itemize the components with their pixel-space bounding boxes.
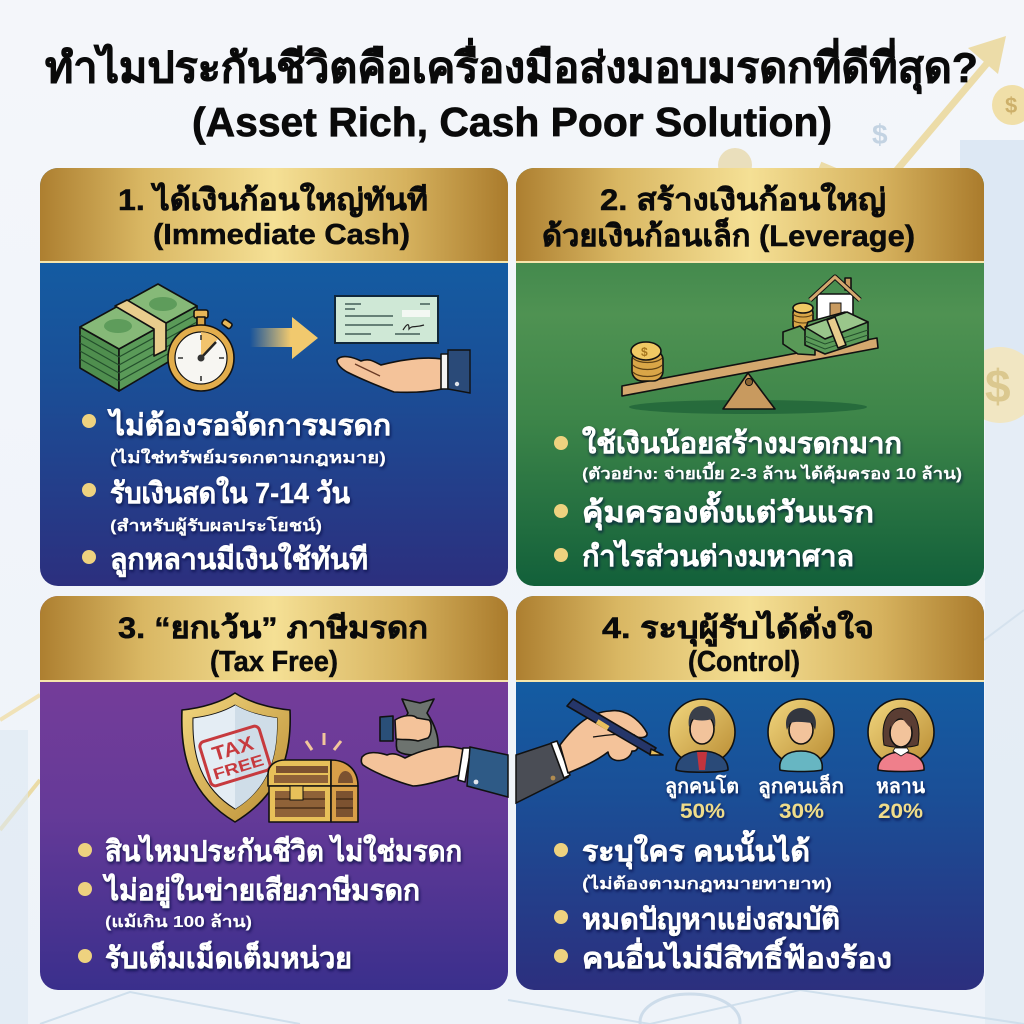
- house: [810, 277, 860, 322]
- panel 3 header: [40, 596, 508, 682]
- title: (Asset Rich, Cash Poor Solution): [192, 99, 832, 145]
- panel 2: leverage: [516, 168, 984, 586]
- bullet list: [554, 829, 892, 975]
- icon: tax free shield: [182, 693, 290, 822]
- bullet list: (สำหรับผู้รับผลประโยชน์): [110, 515, 322, 537]
- share labels: 20%: [878, 800, 923, 823]
- bullet list: (ไม่ต้องตามกฎหมายทายาท): [582, 874, 832, 893]
- icon: seesaw with coins, cash and house: [622, 277, 878, 414]
- icon: stack of cash with stopwatch: [80, 284, 234, 391]
- panel 3 header: 3. “ยกเว้น” ภาษีมรดก: [118, 612, 428, 645]
- share labels: หลาน: [876, 776, 925, 798]
- icon: stopwatch: [168, 310, 234, 391]
- bullet list: ลูกหลานมีเงินใช้ทันที: [110, 542, 368, 577]
- panel 4 header: [516, 596, 984, 682]
- icon: hand holding pen: [516, 699, 663, 803]
- arrow: [250, 317, 318, 359]
- panel 1 header: [40, 168, 508, 263]
- bullet list: สินไหมประกันชีวิต ไม่ใช่มรดก: [105, 834, 462, 868]
- panel 3: tax free: [40, 596, 508, 990]
- title: [45, 38, 978, 145]
- bullet list: [78, 834, 462, 975]
- bullet list: หมดปัญหาแย่งสมบัติ: [582, 904, 840, 937]
- panel 2 header: 2. สร้างเงินก้อนใหญ่: [600, 182, 886, 218]
- background with faint financial chart: $: [1005, 93, 1017, 118]
- panel 1 header: 1. ได้เงินก้อนใหญ่ทันที: [118, 182, 428, 218]
- panel 1 header: (Immediate Cash): [153, 219, 410, 251]
- share labels: ลูกคนโต: [665, 774, 739, 800]
- icon: tax free shield: FREE: [211, 752, 266, 784]
- bullet list: (ตัวอย่าง: จ่ายเบี้ย 2-3 ล้าน ได้คุ้มครอง 10 ล้าน): [582, 461, 962, 484]
- bullet list: กำไรส่วนต่างมหาศาล: [582, 539, 854, 573]
- background with faint financial chart: $: [872, 119, 888, 150]
- share labels: 50%: [680, 800, 725, 823]
- panel 4 header: (Control): [688, 646, 800, 678]
- panel 4 header: 4. ระบุผู้รับได้ดั่งใจ: [602, 606, 874, 647]
- bullet list: (ไม่ใช่ทรัพย์มรดกตามกฎหมาย): [110, 448, 386, 467]
- bullet list: คนอื่นไม่มีสิทธิ์ฟ้องร้อง: [582, 936, 892, 975]
- panel 1: immediate cash: [40, 168, 508, 586]
- person: younger child: [768, 699, 834, 772]
- person: elder child: [669, 699, 735, 772]
- icon: sparkles: [306, 733, 341, 750]
- icon: money bag in hand: [380, 699, 438, 755]
- bullet list: คุ้มครองตั้งแต่วันแรก: [582, 490, 874, 530]
- bullet list: ไม่อยู่ในข่ายเสียภาษีมรดก: [102, 873, 420, 908]
- title: ทำไมประกันชีวิตคือเครื่องมือส่งมอบมรดกที่ดีที่สุด?: [45, 38, 978, 94]
- icon: treasure chest: [268, 760, 358, 822]
- bullet list: ระบุใคร คนนั้นได้: [582, 829, 810, 869]
- back coins: [793, 303, 813, 331]
- cash stacks: [783, 312, 868, 355]
- bullet list: [82, 408, 391, 577]
- bullet list: [554, 426, 962, 573]
- bullet list: รับเงินสดใน 7-14 วัน: [110, 476, 350, 510]
- left coin stack: $: [641, 345, 648, 359]
- bullet list: (แม้เกิน 100 ล้าน): [105, 913, 252, 931]
- share labels: [665, 773, 925, 823]
- share labels: 30%: [779, 800, 824, 823]
- icon: tax free shield: TAX: [210, 732, 257, 766]
- bullet list: ใช้เงินน้อยสร้างมรดกมาก: [582, 426, 902, 460]
- panel 4: control: [516, 596, 984, 990]
- panel 2 header: [516, 168, 984, 263]
- bullet list: ไม่ต้องรอจัดการมรดก: [107, 408, 391, 442]
- bullet list: รับเต็มเม็ดเต็มหน่วย: [105, 940, 352, 975]
- left coin stack: [631, 342, 663, 381]
- panel 2 header: ด้วยเงินก้อนเล็ก (Leverage): [542, 217, 915, 253]
- background with faint financial chart: $: [985, 360, 1011, 412]
- icon: open hand with sleeve: [361, 747, 508, 797]
- share labels: ลูกคนเล็ก: [758, 773, 844, 800]
- icon: cheque: [335, 296, 438, 343]
- panel 3 header: (Tax Free): [210, 646, 338, 678]
- icon: open hand: [337, 350, 470, 393]
- person: grandchild: [868, 699, 934, 772]
